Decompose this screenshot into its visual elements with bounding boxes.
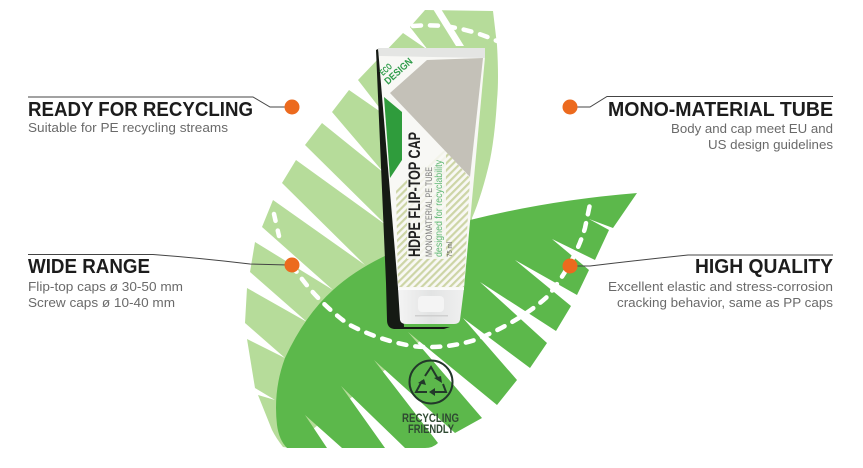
dashed vein on top of light leaf (413, 25, 497, 41)
tube label text: 75 ml (445, 242, 454, 257)
callout: ready for recycling: Suitable for PE recycling streams (28, 120, 229, 135)
flip-top cap (398, 288, 464, 324)
callout: high quality: cracking behavior, same as PP caps (617, 295, 834, 310)
callout: high quality: HIGH QUALITY (695, 256, 834, 278)
callout: wide range (28, 254, 300, 310)
tube label text: designed for recyclability (434, 160, 445, 257)
callout: ready for recycling: READY FOR RECYCLING (28, 99, 253, 121)
tube shadow edge (376, 48, 450, 329)
label backing (407, 120, 446, 259)
badge caption: RECYCLING (402, 413, 459, 425)
eco design mark: ECO (378, 61, 394, 77)
eco design mark: DESIGN (383, 56, 415, 87)
callout: mono-material tube (562, 96, 834, 152)
callout: mono-material tube: US design guidelines (708, 137, 834, 152)
icon: recycling symbol (410, 360, 452, 404)
hatched label area (396, 150, 470, 287)
callout: wide range: Screw caps ø 10-40 mm (28, 295, 175, 310)
callout: ready for recycling (28, 97, 300, 135)
callout: wide range: WIDE RANGE (28, 256, 150, 278)
crimp band (378, 48, 485, 58)
product tube (376, 48, 485, 329)
badge caption: FRIENDLY (408, 424, 454, 436)
dashed leaf vein (274, 204, 590, 347)
callout: high quality (562, 255, 834, 310)
callout: mono-material tube: MONO-MATERIAL TUBE (608, 99, 833, 121)
tube label text: HDPE FLIP-TOP CAP (406, 132, 424, 257)
recycling friendly badge (402, 360, 459, 436)
tube label text (406, 132, 454, 257)
callout: wide range: Flip-top caps ø 30-50 mm (28, 279, 183, 294)
callout: high quality: Excellent elastic and stress-corrosion (608, 279, 833, 294)
badge caption (402, 413, 459, 436)
white stripe across top of light leaf (433, 9, 464, 46)
dark green leaf (276, 193, 637, 448)
green panel (384, 97, 402, 178)
light green leaf (245, 9, 498, 448)
tube body (378, 48, 485, 288)
grey panel (390, 58, 483, 177)
tube label text: MONOMATERIAL PE TUBE (424, 167, 435, 257)
callout: mono-material tube: Body and cap meet EU and (671, 121, 833, 136)
